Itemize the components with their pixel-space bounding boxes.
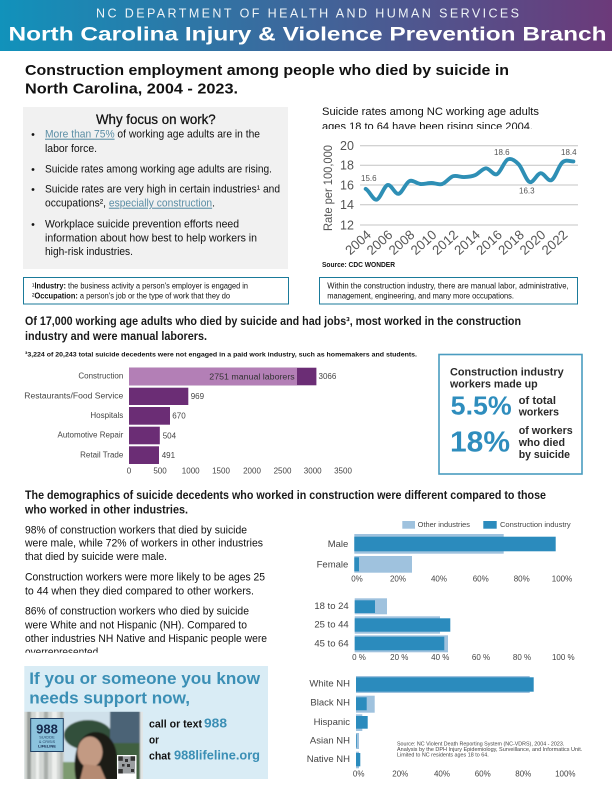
call to action: chat [149, 750, 171, 762]
data source note: Analysis by the DPH Injury Epidemiology, Surveillance, and Informatics Unit. [397, 747, 583, 753]
title [25, 63, 509, 98]
data source note [397, 741, 583, 758]
bar: hospitals [90, 407, 186, 425]
x axis labels: 2012 [429, 227, 461, 258]
race axis ticks: 40% [434, 770, 450, 779]
text block: demographics findings: 86% of construction workers who died by suicide [25, 606, 249, 618]
photo: woman looking out window [24, 711, 144, 780]
chart legend: Construction industry [500, 522, 571, 529]
data labels: 18.6 [494, 148, 510, 157]
bars: 45 to 64 [314, 635, 448, 652]
bar: restaurants [24, 388, 205, 405]
face and shoulders [78, 736, 102, 768]
bars: Asian NH: Asian NH [310, 736, 350, 747]
bar chart: race and ethnicity [307, 676, 576, 779]
callout: construction statistics [439, 354, 582, 474]
bar: construction [78, 368, 337, 385]
heading: industries: industry and were manual laborers. [25, 330, 207, 343]
logo: 988 lifeline: & CRISIS [39, 740, 56, 744]
department name: NC DEPARTMENT OF HEALTH AND HUMAN SERVICES [96, 6, 519, 20]
y axis labels: 18 [340, 159, 354, 173]
data labels: 16.3 [519, 187, 535, 196]
text block: demographics findings: Construction workers were more likely to be ages 25 [25, 572, 265, 584]
bullet: industries and occupations [32, 184, 280, 210]
call to action: 988 [204, 715, 227, 730]
data source note: Limited to NC residents ages 18 to 64. [397, 752, 489, 758]
bars: Native NH: Native NH [307, 754, 350, 765]
x axis labels: 2022 [539, 227, 571, 258]
header banner [0, 0, 612, 51]
definitions box: ¹Industry: the business activity a person's employer is engaged in [32, 282, 248, 291]
foliage [64, 720, 112, 750]
bars: male: Male [328, 539, 348, 550]
call to action: 988lifeline.org [174, 747, 260, 762]
footnote 3: ³3,224 of 20,243 total suicide decedents were not engaged in a paid work industry, such as homemakers and students. [25, 352, 417, 359]
x axis ticks: 3500 [334, 466, 352, 475]
support headline: If you or someone you know [29, 669, 261, 688]
x axis labels: 2016 [473, 227, 505, 258]
statistic: 18%: by suicide [519, 449, 570, 461]
text block: demographics findings: that died by suicide were male. [25, 551, 167, 563]
QR code [117, 755, 136, 779]
rate line [366, 159, 573, 200]
x axis labels: 2006 [364, 227, 396, 258]
bar: automotive [57, 427, 177, 444]
bullet: workplace efforts [32, 219, 257, 258]
data source note: Source: NC Violent Death Reporting System (NC-VDRS), 2004 - 2023. [397, 741, 565, 747]
panel heading: Why focus on work? [96, 112, 216, 127]
sex axis ticks: 40% [431, 574, 447, 583]
bars: White NH [309, 676, 534, 693]
bars: female: Female [317, 559, 348, 570]
x axis ticks: 500 [153, 466, 167, 475]
bars: 25 to 44: 25 to 44 [314, 620, 349, 631]
line chart heading: Suicide rates among NC working age adults [322, 106, 539, 118]
line chart heading [322, 107, 539, 129]
race axis ticks: 80% [515, 770, 531, 779]
panel: 988 lifeline support [24, 666, 268, 780]
age axis ticks: 20 % [390, 653, 408, 662]
bullet: workplace efforts: Workplace suicide prevention efforts need [45, 219, 239, 231]
data labels [361, 148, 577, 196]
bar: construction: 2751 manual laborers [209, 373, 295, 382]
text block: demographics findings: were male, while 72% of workers in other industries [24, 538, 263, 550]
x axis ticks: 1000 [182, 466, 200, 475]
y axis labels: 16 [340, 178, 354, 192]
x axis labels: 2020 [517, 227, 549, 258]
title: North Carolina, 2004 - 2023. [25, 82, 238, 98]
statistic: 18%: of workers [519, 425, 573, 437]
definitions box [24, 278, 288, 304]
bullet: rates rising: Suicide rates among working age adults are rising. [45, 164, 272, 176]
x axis labels: 2018 [495, 227, 527, 258]
curtain [24, 711, 64, 780]
call to action [149, 715, 260, 762]
bars: Hispanic: Hispanic [314, 717, 350, 728]
sex axis ticks: 80% [514, 574, 530, 583]
x axis ticks: 2500 [274, 466, 292, 475]
bars: female [317, 556, 412, 573]
age axis ticks: 0 % [352, 653, 366, 662]
branch name: North Carolina Injury & Violence Prevention Branch [8, 24, 606, 46]
logo: 988 lifeline: SUICIDE [39, 736, 55, 740]
sex axis ticks: 0% [351, 574, 363, 583]
x axis ticks: 0 [127, 466, 132, 475]
bullet: labor force: More than 75% of working age adults are in the [45, 129, 260, 141]
bar: automotive: 504 [163, 431, 177, 440]
bars: Black NH [310, 696, 375, 713]
hair [75, 732, 120, 780]
bar: restaurants: Restaurants/Food Service [24, 391, 124, 400]
panel: why focus on work [23, 107, 288, 269]
text block: demographics findings: 98% of construction workers that died by suicide [25, 524, 247, 536]
statistic: 18%: who died [518, 437, 565, 449]
text block: demographics findings [24, 524, 267, 658]
bullet: industries and occupations: occupations², especially construction. [45, 198, 215, 210]
bars: 18 to 24 [314, 598, 387, 614]
bullet: labor force [32, 129, 260, 155]
data labels: 18.4 [561, 148, 577, 157]
age axis ticks [352, 653, 575, 662]
x axis ticks [127, 466, 352, 475]
bars: Asian NH [310, 733, 359, 749]
statistic: 5.5%: workers [518, 407, 559, 419]
support headline [29, 669, 261, 708]
y axis labels: 12 [340, 218, 354, 232]
x axis labels: 2014 [451, 227, 483, 258]
statistic: 5.5% [451, 390, 559, 420]
construction occupations note: management, engineering, and many more occupations. [327, 292, 514, 301]
chart legend: Other industries [418, 522, 471, 529]
heading: industries: Of 17,000 working age adults who died by suicide and had jobs³, most worked in the construction [25, 315, 521, 328]
sex axis ticks [351, 574, 572, 583]
age axis ticks: 60 % [472, 653, 490, 662]
bullet: workplace efforts: high-risk industries. [45, 246, 133, 258]
chart source: Source: CDC WONDER [322, 262, 395, 269]
logo: 988 lifeline: 988 [36, 722, 58, 736]
bar: automotive: Automotive Repair [57, 431, 124, 440]
call to action: call or text [149, 718, 202, 730]
bar: hospitals: Hospitals [90, 411, 123, 420]
race axis ticks: 100% [555, 770, 576, 779]
statistic: 5.5%: of total [519, 395, 556, 407]
bar: retail: Retail Trade [80, 450, 124, 459]
sex axis ticks: 100% [552, 574, 572, 583]
heading: demographics: who worked in other industries. [24, 504, 188, 517]
bullet: labor force: labor force. [45, 143, 97, 155]
bar chart: deaths by industry [24, 368, 352, 475]
race axis ticks [353, 770, 576, 779]
statistic: 5.5%: 5.5% [451, 390, 512, 420]
age axis ticks: 40 % [431, 653, 449, 662]
building [110, 711, 140, 743]
bars: 25 to 44 [314, 616, 450, 634]
x axis ticks: 3000 [304, 466, 322, 475]
callout: construction statistics: workers made up [449, 378, 538, 390]
x axis labels: 2010 [408, 227, 440, 258]
sex axis ticks: 20% [390, 574, 406, 583]
bars: White NH: White NH [309, 678, 350, 689]
statistic: 18%: 18% [450, 427, 510, 459]
callout heading: Construction industry [450, 367, 565, 379]
data labels: 15.6 [361, 174, 377, 183]
age axis ticks: 80 % [513, 653, 531, 662]
construction occupations note [320, 278, 578, 304]
title: Construction employment among people who died by suicide in [25, 63, 509, 79]
chart legend [402, 521, 571, 529]
construction occupations note: Within the construction industry, there are manual labor, administrative, [327, 282, 569, 291]
line chart: suicide rates [323, 139, 578, 258]
y axis labels: Rate per 100,000 [323, 145, 335, 231]
call to action: or [149, 734, 160, 746]
definitions box: ²Occupation: a person's job or the type of work that they do [32, 292, 231, 301]
bars: Hispanic [314, 714, 368, 731]
bar chart: age [314, 598, 575, 662]
x axis ticks: 1500 [212, 466, 230, 475]
logo: 988 lifeline [31, 718, 63, 752]
bar: construction: 3066 [318, 372, 337, 381]
bars: Native NH [307, 752, 360, 768]
logo: 988 lifeline: LIFELINE [38, 744, 56, 748]
x axis ticks: 2000 [243, 466, 261, 475]
race axis ticks: 20% [392, 770, 408, 779]
y axis labels: 14 [340, 198, 354, 212]
heading: demographics: The demographics of suicide decedents who worked in construction were different compared to those [25, 489, 547, 502]
bars: 18 to 24: 18 to 24 [314, 601, 349, 612]
race axis ticks: 60% [475, 770, 491, 779]
age axis ticks: 100 % [552, 653, 575, 662]
y axis labels [323, 139, 354, 232]
bars: Black NH: Black NH [310, 698, 350, 709]
bars: 45 to 64: 45 to 64 [314, 638, 349, 649]
sex axis ticks: 60% [473, 574, 489, 583]
race axis ticks: 0% [353, 770, 364, 779]
bar: restaurants: 969 [191, 392, 205, 401]
text block: demographics findings: other industries NH Native and Hispanic people were [25, 633, 267, 645]
heading: demographics [24, 489, 547, 517]
support headline: needs support now, [29, 689, 190, 708]
bar: retail [80, 446, 176, 464]
x axis labels: 2008 [386, 227, 418, 258]
bar: hospitals: 670 [172, 412, 186, 421]
bars: male [328, 534, 556, 554]
text block: demographics findings: to 44 when they died compared to other workers. [25, 586, 254, 598]
line chart heading: ages 18 to 64 have been rising since 2004. [322, 121, 533, 133]
bar chart: sex [317, 534, 572, 583]
x axis labels: 2004 [342, 227, 374, 258]
heading: industries [25, 315, 521, 343]
text block: demographics findings: overrepresented. [25, 646, 101, 658]
bullet: workplace efforts: information about how best to help workers in [45, 233, 257, 245]
bullet: industries and occupations: Suicide rates are very high in certain industries¹ and [45, 184, 280, 196]
bar: retail: 491 [162, 451, 176, 460]
text block: demographics findings: were White and not Hispanic (NH). Compared to [24, 620, 247, 632]
x axis labels [342, 227, 571, 258]
y axis labels: 20 [340, 139, 354, 153]
bar: construction: Construction [78, 372, 123, 381]
statistic: 18% [450, 425, 573, 461]
